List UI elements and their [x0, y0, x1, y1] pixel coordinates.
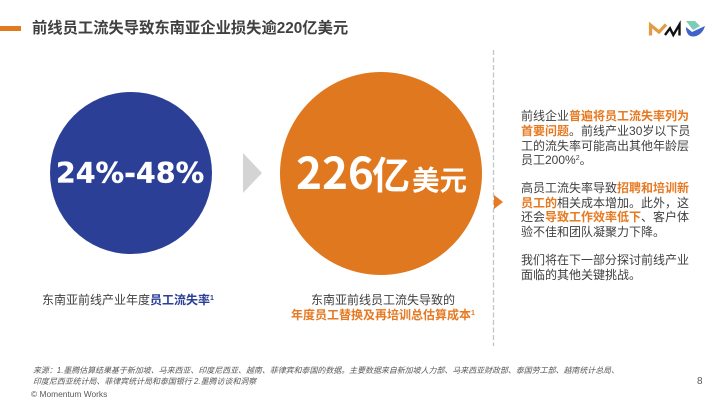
total cost value: 亿 — [372, 145, 410, 200]
text block: key findings: 验不佳和团队凝聚力下降。 — [521, 225, 665, 239]
source note: 印度尼西亚统计局、菲律宾统计局和泰国银行 2.墨腾访谈和洞察 — [33, 377, 256, 386]
text block: key findings: 高员工流失率导致招聘和培训新 — [521, 181, 689, 195]
orange circle: total cost — [280, 72, 482, 275]
icon: orange pointer — [494, 195, 503, 209]
page number: 8 — [697, 376, 703, 387]
title accent bar — [0, 26, 21, 31]
caption: total cost: 年度员工替换及再培训总估算成本1 — [291, 308, 475, 322]
text block: key findings: 工的流失率可能高出其他年龄层 — [521, 139, 689, 153]
text block: key findings: 员工200%2。 — [521, 153, 592, 167]
text block: key findings: 面临的其他关键挑战。 — [521, 268, 641, 282]
text block: key findings: 前线企业普遍将员工流失率列为 — [521, 109, 689, 123]
source note — [33, 366, 619, 386]
source note: 来源：1.墨腾估算结果基于新加坡、马来西亚、印度尼西亚、越南、菲律宾和泰国的数据。主要数据来自新加坡人力部、马来西亚财政部、泰国劳工部、越南统计总局、 — [33, 366, 619, 375]
total cost value: 226 — [296, 138, 374, 202]
text block: key findings: 员工的相关成本增加。此外，这 — [521, 196, 689, 210]
caption: total cost: 东南亚前线员工流失导致的 — [311, 293, 455, 307]
total cost value: 美元 — [412, 158, 467, 198]
total cost value — [296, 138, 467, 202]
icon: Momentum Works logo — [648, 20, 705, 38]
text block: key findings: 我们将在下一部分探讨前线产业 — [521, 253, 689, 267]
title: 前线员工流失导致东南亚企业损失逾220亿美元 — [32, 20, 348, 37]
arrow: grey chevron — [243, 153, 262, 193]
caption: total cost — [291, 293, 475, 322]
blue circle: turnover rate — [50, 92, 212, 254]
text block: key findings: 首要问题。前线产业30岁以下员 — [521, 124, 690, 138]
vertical dashed divider — [492, 50, 494, 346]
text block: key findings — [521, 109, 690, 282]
caption: turnover rate: 东南亚前线产业年度员工流失率1 — [42, 293, 214, 307]
turnover rate value: 24%-48% — [56, 157, 204, 190]
text block: key findings: 还会导致工作效率低下、客户体 — [521, 210, 689, 224]
copyright: © Momentum Works — [31, 389, 107, 399]
